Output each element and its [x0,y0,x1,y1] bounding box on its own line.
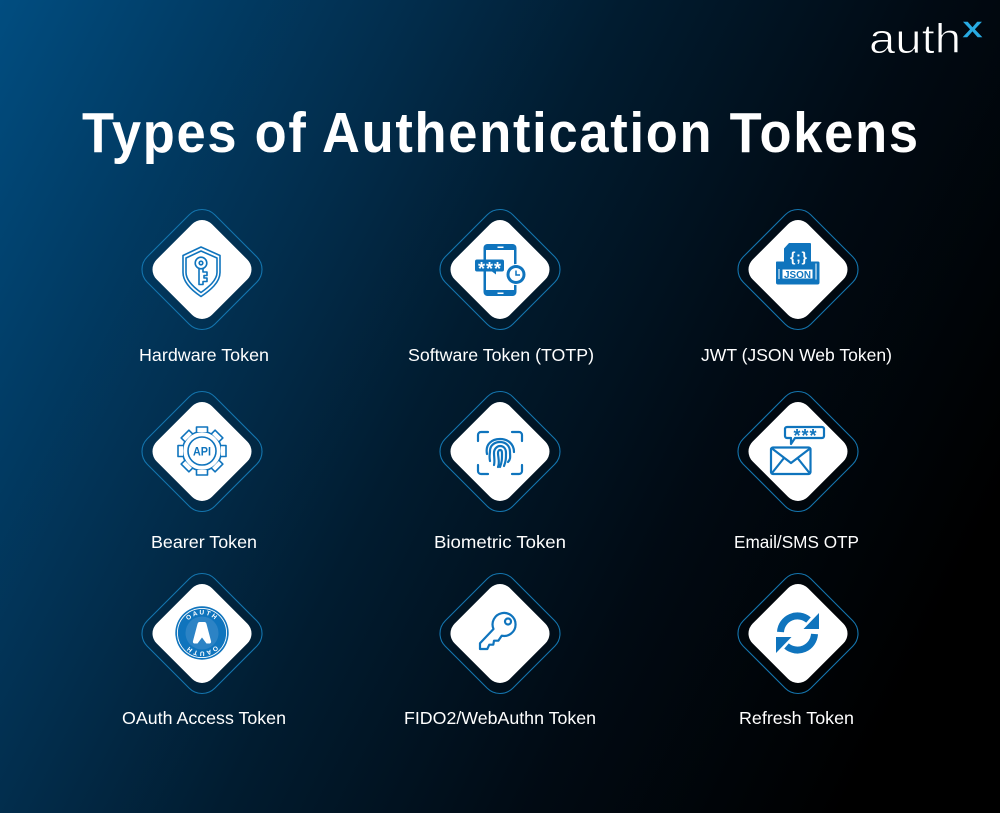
icon: key [480,613,516,649]
panel: Software Token (TOTP) [408,202,594,365]
panel: OAuth Access Token [122,573,286,728]
label: OAuth Access Token [122,708,286,728]
diamond badge [433,384,567,519]
panel: FIDO2/WebAuthn Token [404,566,596,728]
panel: Email/SMS OTP [731,384,865,552]
diamond badge [135,202,269,337]
icon: JSON document: JSON [784,270,811,281]
label: Bearer Token [151,532,257,552]
diamond badge [135,384,269,519]
label: Refresh Token [739,708,854,728]
label: JWT (JSON Web Token) [701,345,892,365]
label: FIDO2/WebAuthn Token [404,708,596,728]
panel: Refresh Token [731,566,865,728]
diamond badge [731,202,865,337]
label: Software Token (TOTP) [408,345,594,365]
icon: API gear: API [193,444,211,458]
panel: Bearer Token [135,384,269,552]
label: Biometric Token [434,532,566,552]
logo: authX [869,12,983,62]
panel: Hardware Token [135,202,269,365]
icon: OAuth seal [175,606,229,660]
icon: shield with key [183,247,220,296]
icon: JSON document [776,243,820,284]
title: Types of Authentication Tokens [82,100,918,164]
icon: refresh arrows [776,613,819,653]
icon: envelope with code bubble: *** [794,426,816,446]
diamond badge [433,566,567,701]
diamond badge [731,384,865,519]
diamond badge [433,202,567,337]
icon: phone with code and clock: *** [478,259,501,279]
icon: JSON document: {;} [790,248,808,264]
icon: envelope with code bubble [771,426,824,474]
label: Email/SMS OTP [734,532,859,552]
icon: API gear [178,427,226,475]
diamond badge [731,566,865,701]
icon: OAuth seal: OAUTH [186,646,218,656]
label: Hardware Token [139,345,269,365]
icon: OAuth seal: OAUTH [186,610,218,620]
logo: authX: x [963,12,983,44]
diamond badge [135,566,269,701]
icon: fingerprint scan [478,432,522,474]
panel: Biometric Token [433,384,567,552]
panel: JWT [701,202,892,365]
icon: phone with code and clock [475,244,526,296]
logo: authX: auth [869,15,961,62]
